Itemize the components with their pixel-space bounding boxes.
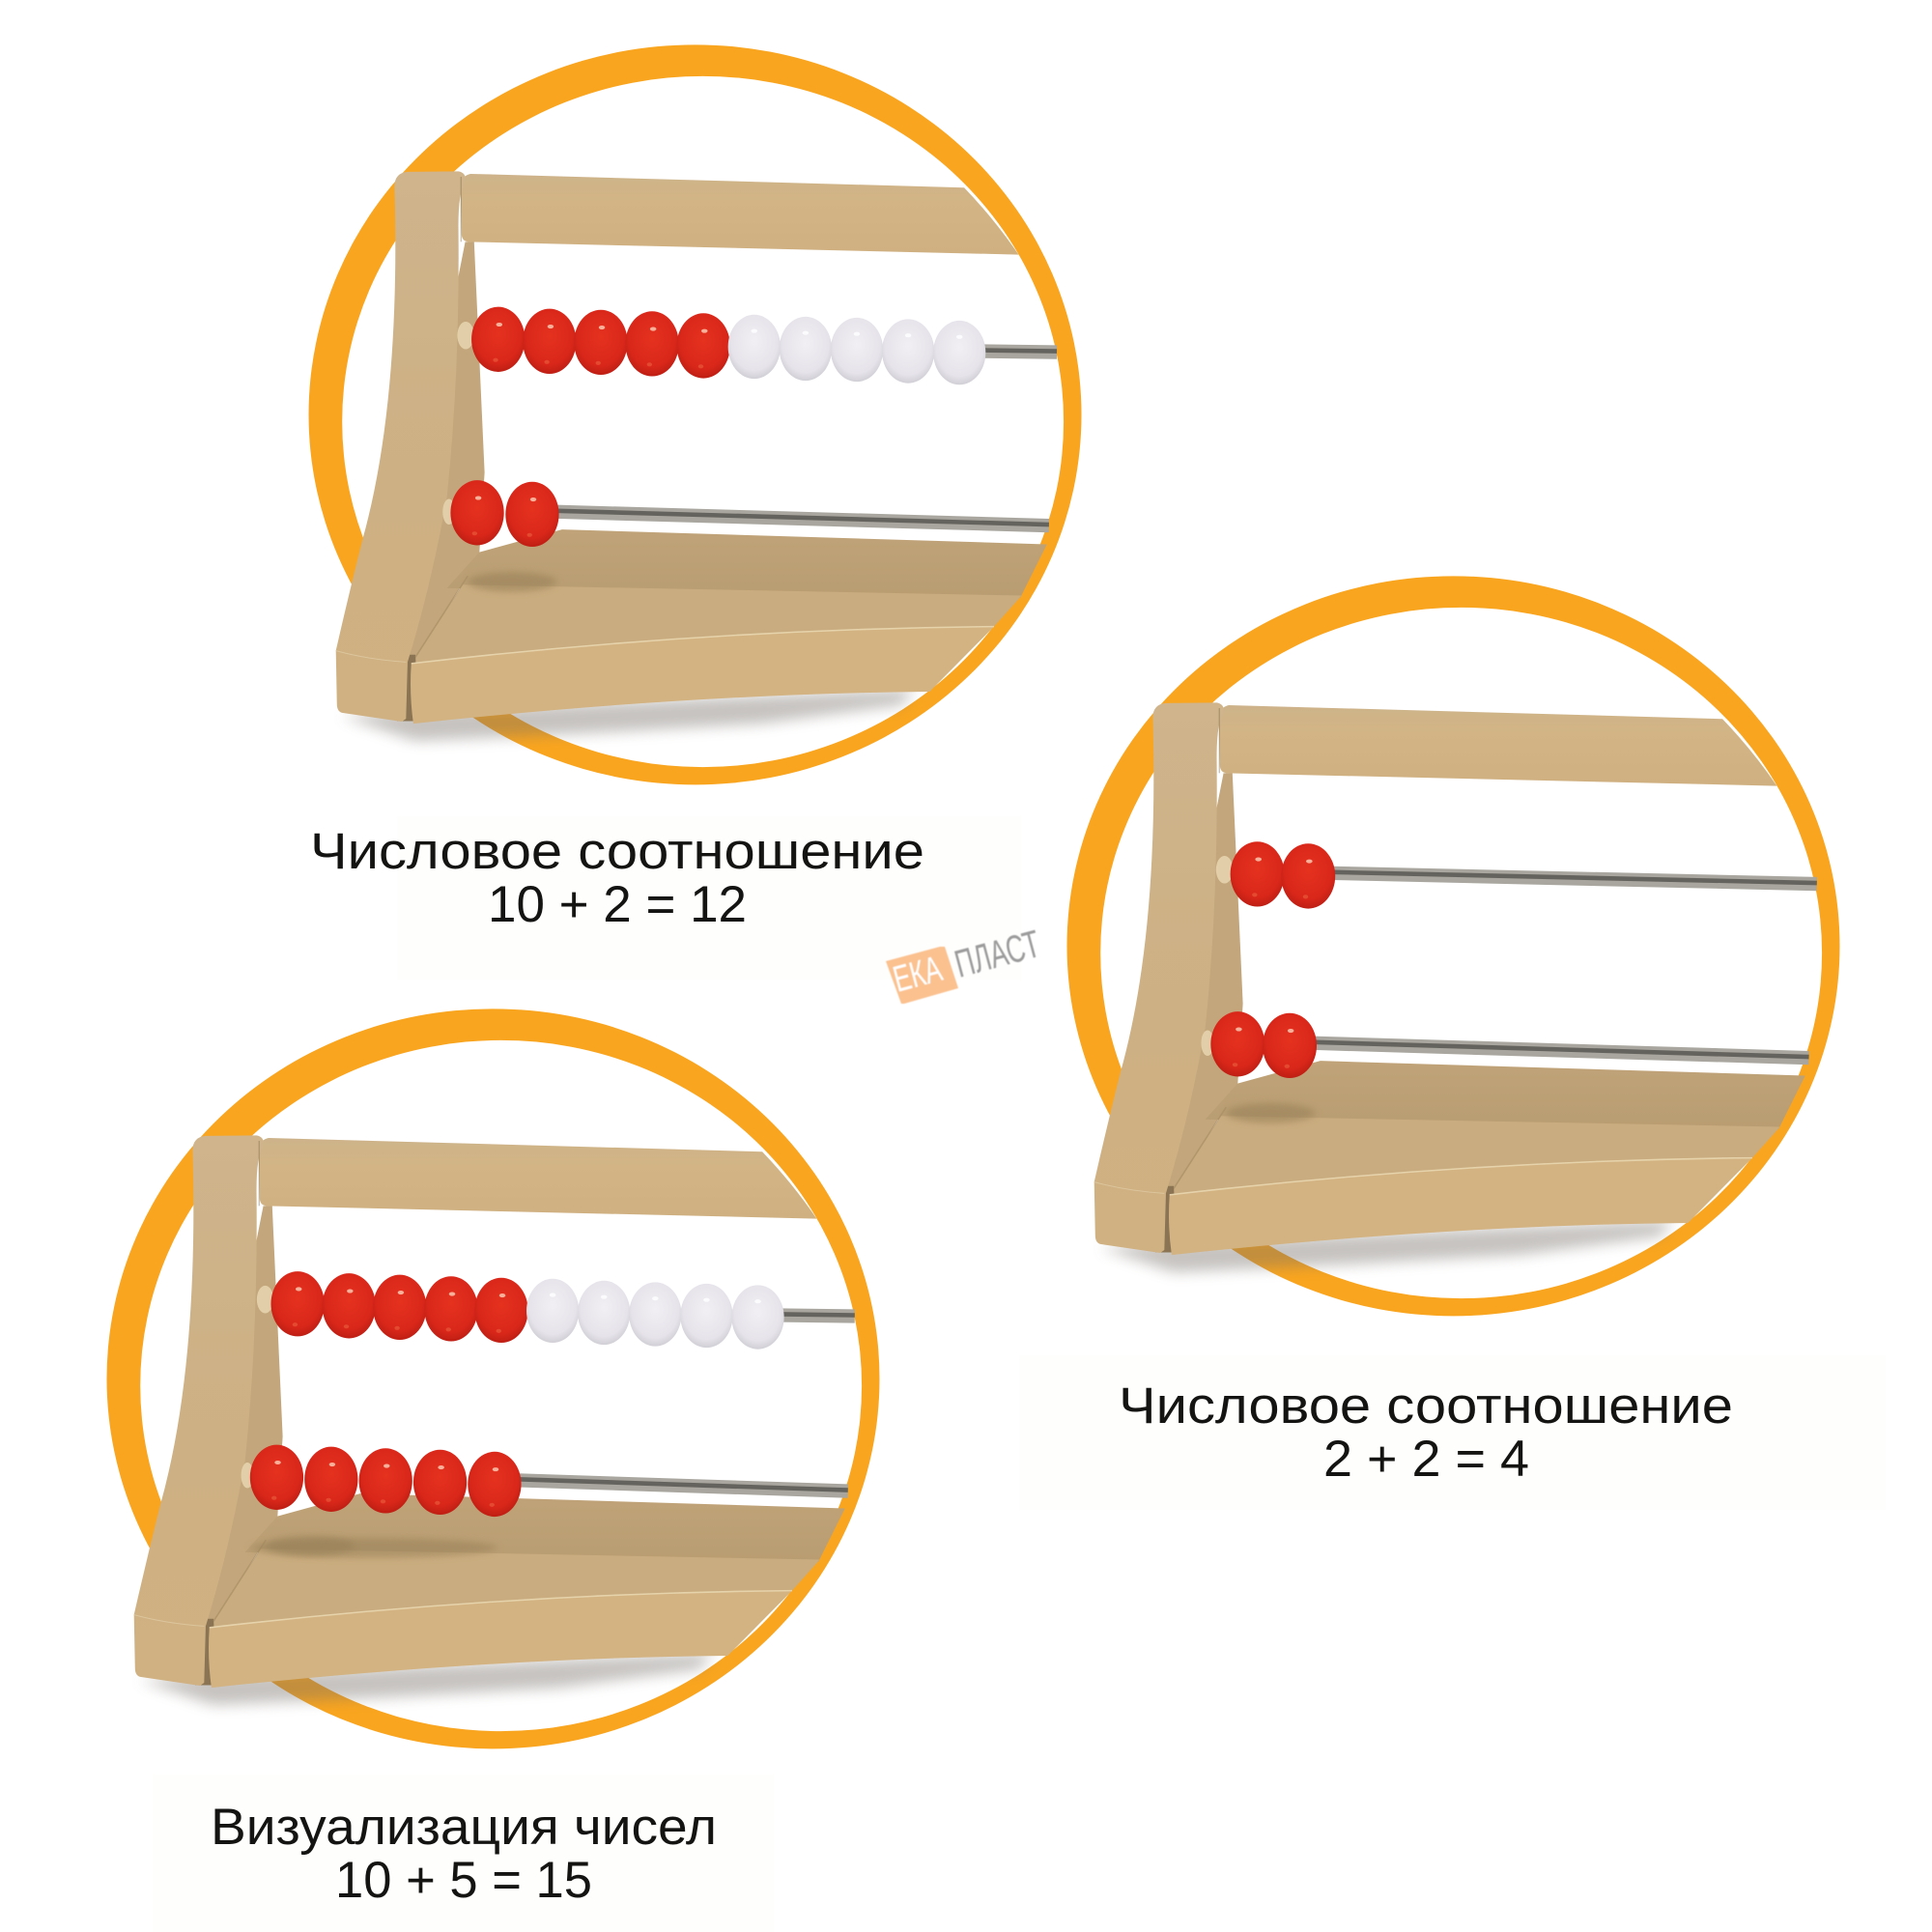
label: 10 + 2 = 12: 10 + 2 = 12 (488, 876, 747, 933)
orange ring (107, 1009, 880, 1748)
abacus frame (336, 171, 1047, 741)
label: 10 + 5 = 15: Визуализация чисел (211, 1799, 717, 1856)
panel: abacus 2 + 2 = 4 (1067, 576, 1840, 1316)
beads and rods (242, 1271, 855, 1557)
logo text: ЕКА (889, 949, 947, 1001)
orange ring (1067, 576, 1840, 1316)
label: 2 + 2 = 4: Числовое соотношение (1119, 1378, 1733, 1435)
label: 10 + 5 = 15: 10 + 5 = 15 (335, 1852, 592, 1909)
label: 2 + 2 = 4: 2 + 2 = 4 (1323, 1431, 1529, 1488)
label: 10 + 2 = 12 (310, 816, 1021, 980)
logo icon: orange book (886, 947, 958, 1004)
label: 10 + 5 = 15 (153, 1775, 774, 1932)
panel: abacus 10 + 2 = 12 (309, 44, 1082, 784)
label: 2 + 2 = 4 (1019, 1355, 1886, 1510)
label: 10 + 2 = 12: Числовое соотношение (310, 823, 924, 880)
orange ring (309, 44, 1082, 784)
logo watermark: ПЛАСТ (951, 923, 1044, 986)
beads and rods (1201, 841, 1817, 1078)
logo watermark (886, 923, 1044, 1004)
abacus frame (1094, 702, 1805, 1272)
abacus frame (134, 1135, 845, 1705)
panel: abacus 10 + 5 = 15 (107, 1009, 880, 1748)
beads and rods (442, 307, 1057, 547)
